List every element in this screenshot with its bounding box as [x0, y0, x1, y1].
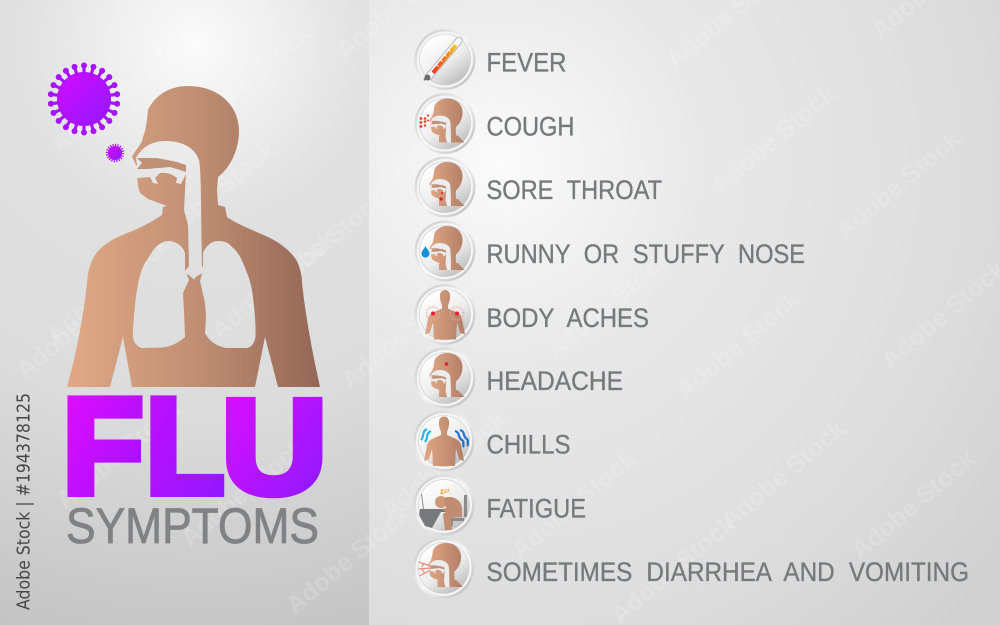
title: FLU: F	[62, 370, 144, 522]
icon: cough	[414, 93, 476, 154]
watermarks: Adobe Stock	[281, 500, 416, 620]
icon: fever thermometer	[414, 29, 476, 90]
watermarks: Adobe Stock	[336, 275, 471, 395]
title: FLU: U	[222, 372, 327, 522]
icon: fatigue: z	[447, 488, 450, 494]
watermarks: Adobe Stock	[206, 225, 341, 345]
icon: runny nose	[414, 220, 476, 282]
icon: diarrhea and vomiting	[413, 538, 474, 598]
label: SOMETIMES DIARRHEA AND VOMITING: SOMETIMES DIARRHEA AND VOMITING	[486, 557, 969, 587]
watermarks: Adobe Stock	[176, 433, 311, 553]
body silhouette	[67, 86, 320, 387]
nasal passage	[137, 158, 186, 172]
watermarks: Adobe Stock	[371, 75, 506, 195]
icon: sore throat	[414, 156, 476, 218]
icon: fatigue	[414, 474, 474, 536]
label: FATIGUE: FATIGUE	[486, 493, 586, 523]
vertical stock credit: Adobe Stock | #194378125	[14, 393, 34, 610]
watermarks: Adobe Stock	[41, 230, 176, 350]
watermarks: Adobe Stock	[716, 415, 851, 535]
watermarks: Adobe Stock	[671, 285, 806, 405]
icon: fatigue: z	[440, 487, 444, 496]
watermarks: Adobe Stock	[541, 245, 676, 365]
label: BODY ACHES: BODY ACHES	[486, 303, 649, 333]
watermarks: Adobe Stock	[376, 405, 511, 525]
watermarks: Adobe Stock	[51, 395, 186, 515]
label: CHILLS: CHILLS	[486, 430, 570, 460]
watermarks: Adobe Stock	[506, 445, 641, 565]
label: FEVER: FEVER	[486, 48, 566, 78]
icon: fatigue: z	[444, 489, 447, 495]
title: FLU	[62, 370, 327, 523]
icon: body aches	[414, 284, 476, 345]
title: FLU: L	[146, 371, 224, 523]
icon: headache	[414, 348, 476, 408]
label: HEADACHE: HEADACHE	[486, 366, 623, 396]
subtitle: SYMPTOMS: SYMPTOMS	[66, 498, 319, 554]
virus: small	[107, 145, 123, 161]
background: left panel	[0, 0, 369, 625]
label: RUNNY OR STUFFY NOSE: RUNNY OR STUFFY NOSE	[486, 239, 805, 269]
watermarks: Adobe Stock	[11, 265, 146, 385]
watermarks: Adobe Stock	[256, 185, 391, 305]
human respiratory figure	[67, 86, 320, 387]
label: COUGH: COUGH	[486, 112, 574, 142]
background: right panel	[369, 0, 1000, 625]
icon: chills	[414, 410, 474, 472]
watermarks: Adobe Stock	[831, 125, 966, 245]
watermarks: Adobe Stock	[46, 40, 181, 160]
watermarks: Adobe Stock	[181, 20, 316, 140]
label: SORE THROAT: SORE THROAT	[486, 175, 662, 205]
watermarks: Adobe Stock	[496, 115, 631, 235]
virus: large	[47, 62, 121, 136]
watermarks: Adobe Stock	[146, 135, 281, 255]
watermarks: Adobe Stock	[706, 80, 841, 200]
watermarks: Adobe Stock	[846, 445, 981, 565]
